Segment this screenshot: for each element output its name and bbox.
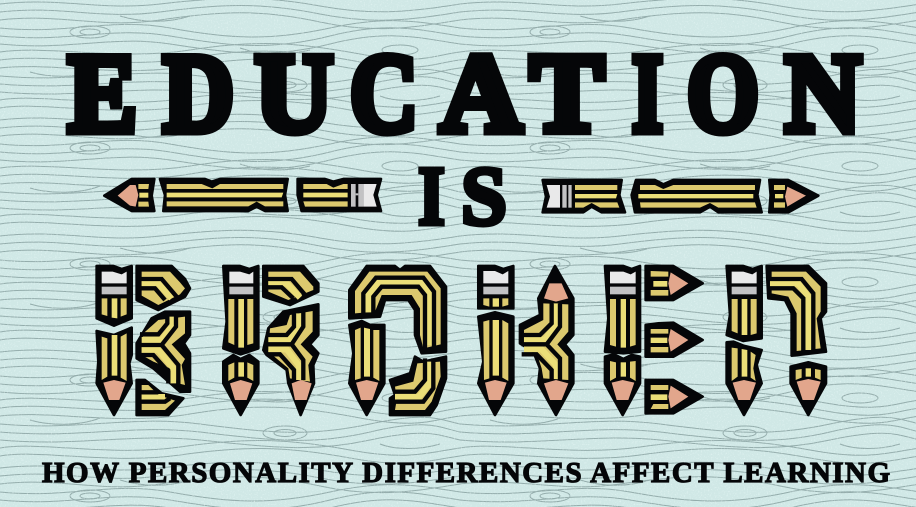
left broken pencil — [104, 179, 381, 211]
letter K arms — [520, 266, 573, 415]
word: IS: I — [418, 150, 445, 243]
title: EDUCATION: C — [350, 32, 418, 156]
word: IS — [418, 150, 507, 243]
title: EDUCATION — [68, 32, 861, 156]
word: BROKEN pencil letters O, K (I and K shapes) — [349, 266, 573, 415]
word: BROKEN pencil letters B and R — [97, 266, 318, 415]
title: EDUCATION: D — [163, 32, 234, 156]
letter E — [605, 266, 703, 415]
title: EDUCATION: E — [68, 32, 137, 156]
title: EDUCATION: N — [785, 32, 861, 156]
title: EDUCATION: T — [530, 32, 604, 156]
letter O — [349, 266, 446, 415]
word: BROKEN pencil letters E and N — [605, 266, 826, 415]
right broken pencil — [543, 180, 818, 212]
word: IS: S — [461, 150, 507, 243]
title: EDUCATION: A — [440, 32, 522, 156]
letter K stem — [478, 266, 513, 415]
subtitle: HOW PERSONALITY DIFFERENCES AFFECT LEARNING — [42, 457, 890, 489]
letter B — [97, 266, 190, 415]
title: EDUCATION: O — [687, 32, 759, 156]
title: EDUCATION: U — [255, 32, 333, 156]
letter R — [223, 266, 318, 415]
title: EDUCATION: I — [632, 32, 663, 156]
letter N — [727, 266, 826, 415]
